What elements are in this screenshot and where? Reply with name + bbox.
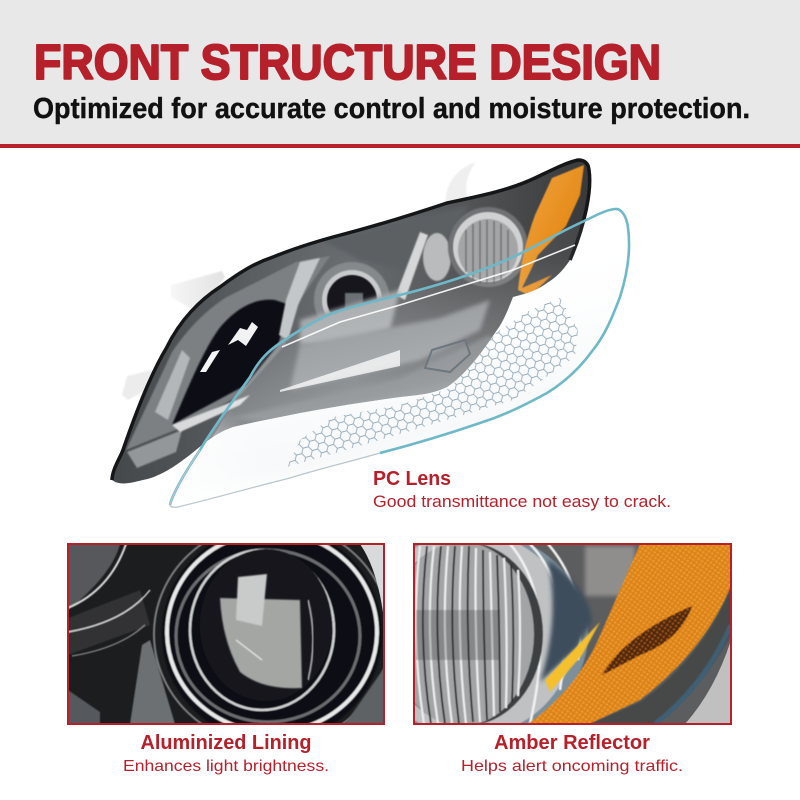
header band <box>0 0 800 148</box>
lens rings <box>162 545 382 723</box>
hexagon mesh <box>287 298 578 467</box>
amber corner <box>518 165 584 296</box>
projector lens <box>314 262 390 316</box>
lens reflection <box>220 598 302 688</box>
panel: aluminized lining photo <box>67 543 385 725</box>
panel: amber reflector photo <box>413 543 732 725</box>
PC Lens caption: Good transmittance not easy to crack. <box>373 492 671 511</box>
lower housing band <box>230 335 500 425</box>
inner housing detail seen through the lens <box>425 340 470 372</box>
Aluminized Lining caption <box>123 732 329 775</box>
PC Lens caption: PC Lens <box>373 468 451 490</box>
small reflector <box>423 233 451 281</box>
black top rim <box>112 160 590 480</box>
title: FRONT STRUCTURE DESIGN <box>34 36 661 90</box>
headlight illustration <box>112 160 590 483</box>
amber lens <box>528 544 731 724</box>
mounting tabs <box>122 162 476 400</box>
Aluminized Lining caption: Enhances light brightness. <box>123 758 329 775</box>
lens highlight <box>282 245 575 347</box>
amber lens dark diamond <box>602 606 692 675</box>
lens rim <box>170 209 629 505</box>
PC lens cover <box>170 209 629 507</box>
lamp housing <box>112 160 590 483</box>
Amber Reflector caption <box>461 732 683 775</box>
lamp interior <box>126 165 584 468</box>
chrome struts <box>396 232 428 300</box>
clear lamp rings <box>415 545 588 723</box>
lens lower-left fade <box>212 416 236 438</box>
Amber Reflector caption: Amber Reflector <box>494 732 650 754</box>
round fog lamp <box>448 207 528 287</box>
lens body <box>170 209 629 507</box>
PC Lens caption <box>373 468 671 511</box>
Amber Reflector caption: Helps alert oncoming traffic. <box>461 758 683 775</box>
subtitle: Optimized for accurate control and moisture protection. <box>33 93 750 125</box>
Aluminized Lining caption: Aluminized Lining <box>140 732 312 754</box>
lens lower rim <box>170 450 380 507</box>
